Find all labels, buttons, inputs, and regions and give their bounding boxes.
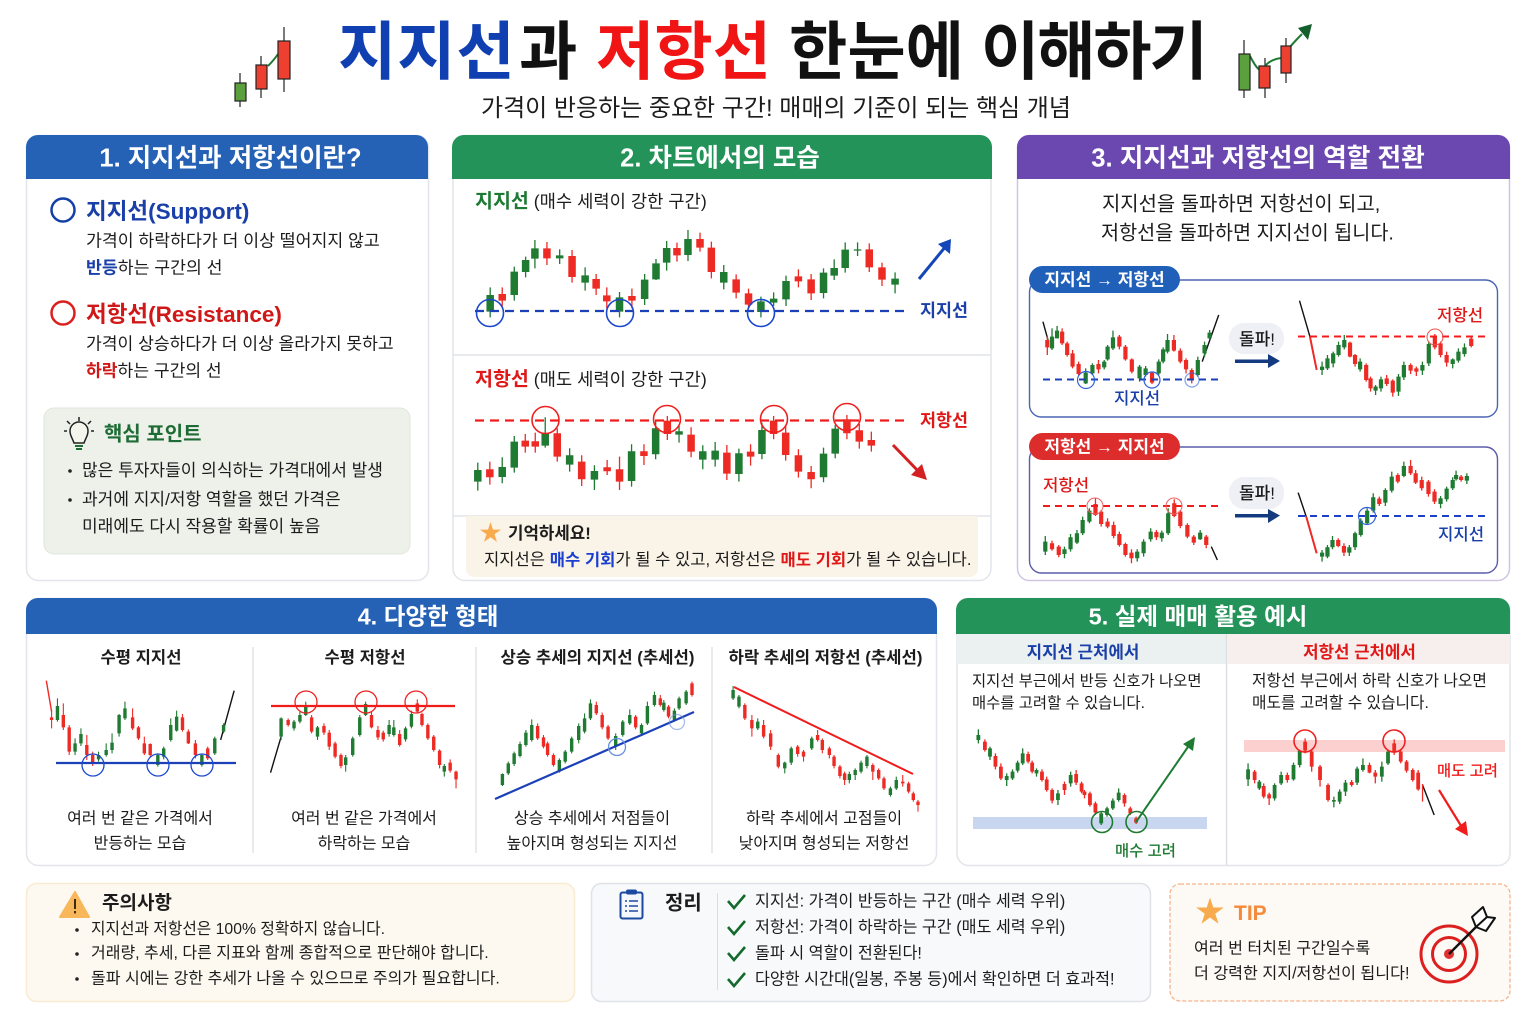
divider: [1226, 634, 1228, 865]
column: horizontal support: 수평 지지선: [101, 648, 181, 667]
tip text: 여러 번 터치된 구간일수록: [1194, 940, 1370, 958]
panel 2 header bar: [452, 135, 992, 179]
column: near support: 지지선 근처에서: [1027, 643, 1139, 662]
touch circles: [295, 691, 427, 713]
support touch circles: [1078, 372, 1199, 388]
sell circles: [1294, 730, 1405, 752]
mini chart: [502, 682, 692, 786]
column: downtrend resistance: 하락 추세의 저항선 (추세선): [729, 648, 922, 667]
column dividers: [253, 647, 712, 853]
new support line: [1298, 515, 1486, 517]
resistance definition: 가격이 상승하다가 더 이상 올라가지 못하고: [86, 334, 394, 354]
resistance touch circle: [1427, 329, 1443, 345]
icon: light bulb: [64, 417, 94, 449]
panel 5 header bar: [956, 598, 1510, 634]
support definition: [86, 230, 380, 278]
resistance zone band: [1244, 740, 1505, 752]
arrow: sell: [1439, 790, 1468, 836]
remember callout: [466, 516, 978, 577]
support explanation: 매수를 고려할 수 있습니다.: [972, 694, 1145, 712]
caption: 상승 추세에서 저점들이: [514, 810, 670, 828]
breakout bubble: [1229, 477, 1284, 509]
resistance explanation: 매도를 고려할 수 있습니다.: [1252, 694, 1429, 712]
resistance touch circles: [1087, 498, 1182, 514]
support term: 지지선(Support): [86, 199, 249, 224]
mini chart: [271, 699, 456, 788]
panel: caution: [26, 884, 574, 1002]
resistance definition: [86, 334, 394, 380]
arrow: down: [893, 445, 927, 480]
trend line: [734, 687, 913, 774]
resistance line: [271, 705, 455, 707]
check list: 돌파 시 역할이 전환된다!: [755, 944, 922, 962]
support subheading: 지지선 (매수 세력이 강한 구간): [475, 190, 707, 212]
panel: tip: [1170, 884, 1510, 1001]
touch circles: [608, 714, 684, 756]
caution bullets: 지지선과 저항선은 100% 정확하지 않습니다.: [91, 920, 385, 938]
icon: candles with arrow right: [1239, 24, 1312, 98]
breakout bubble: 돌파!: [1239, 330, 1275, 349]
caution heading: 주의사항: [102, 892, 172, 914]
caution bullets: 돌파 시에는 강한 추세가 나올 수 있으므로 주의가 필요합니다.: [91, 970, 500, 988]
icon: red ring: [52, 302, 74, 324]
column: downtrend resistance: [729, 648, 922, 852]
icon: rising candles left: [235, 27, 290, 107]
divider: [453, 354, 991, 356]
callout text: 지지선은 매수 기회가 될 수 있고, 저항선은 매도 기회가 될 수 있습니다.: [484, 550, 971, 569]
arrow: up: [919, 239, 951, 279]
caption: [507, 810, 677, 852]
candles after breakout: [1300, 301, 1471, 397]
subtitle: 가격이 반응하는 중요한 구간! 매매의 기준이 되는 핵심 개념: [481, 95, 1071, 122]
callout heading: 기억하세요!: [508, 524, 591, 543]
tip text: [1194, 940, 1409, 982]
title: 이해하기: [981, 18, 1205, 88]
title: 과: [519, 18, 577, 88]
breakout bubble: 돌파!: [1239, 484, 1275, 503]
panel: 3 role reversal: [1017, 135, 1510, 580]
resistance touch circles: [532, 404, 860, 434]
column: near resistance: [1227, 634, 1510, 836]
resistance subheading: 저항선 (매도 세력이 강한 구간): [475, 368, 707, 390]
caption: [739, 810, 909, 852]
pill label: [1029, 433, 1180, 460]
panel: 5 trading examples: [956, 598, 1510, 866]
key point box: [44, 408, 410, 554]
icon: target with dart: [1421, 907, 1495, 982]
column: near support: [957, 634, 1226, 860]
divider: [453, 515, 991, 517]
caption: 반등하는 모습: [94, 834, 186, 852]
intro text: [1101, 192, 1394, 244]
caption: 높아지며 형성되는 지지선: [507, 834, 677, 852]
resistance candlestick chart: [478, 415, 871, 491]
arrow: breakout: [1235, 354, 1280, 368]
check list: 저항선: 가격이 하락하는 구간 (매도 세력 우위): [755, 918, 1065, 936]
resistance definition: 하락하는 구간의 선: [86, 360, 222, 380]
panel 3 header bar: [1017, 135, 1510, 179]
tip text: 더 강력한 지지/저항선이 됩니다!: [1194, 964, 1409, 982]
check list: 지지선: 가격이 반등하는 구간 (매수 세력 우위): [755, 892, 1065, 910]
buy label: 매수 고려: [1115, 842, 1176, 860]
support definition: 반등하는 구간의 선: [86, 258, 223, 278]
summary heading: 정리: [665, 892, 702, 914]
candles: [978, 729, 1136, 825]
caution bullets: 거래량, 추세, 다른 지표와 함께 종합적으로 판단해야 합니다.: [91, 944, 489, 962]
key point heading: 핵심 포인트: [104, 422, 202, 446]
touch circles: [82, 754, 213, 776]
panel: summary: [592, 884, 1150, 1002]
check list: 다양한 시간대(일봉, 주봉 등)에서 확인하면 더 효과적!: [755, 970, 1115, 988]
icon: warning triangle: [60, 892, 89, 917]
panel 4 heading: 4. 다양한 형태: [358, 604, 498, 630]
support label: 지지선: [1438, 525, 1484, 544]
resistance explanation: [1252, 672, 1487, 712]
pill label: 저항선 → 지지선: [1044, 438, 1165, 456]
intro text: 지지선을 돌파하면 저항선이 되고,: [1102, 192, 1380, 216]
candles before breakout: [1045, 498, 1217, 563]
key point bullets: 미래에도 다시 작용할 확률이 높음: [82, 517, 320, 536]
check list: [728, 892, 1115, 988]
caption: 여러 번 같은 가격에서: [291, 810, 437, 828]
mini chart: [46, 681, 234, 767]
support touch circles: [476, 300, 774, 326]
support explanation: [972, 672, 1202, 712]
buy circles: [1092, 812, 1147, 832]
caption: [67, 810, 213, 852]
column: near resistance: 저항선 근처에서: [1303, 643, 1416, 662]
icon: star: [480, 522, 501, 542]
pill label: 지지선 → 저항선: [1044, 270, 1165, 290]
panel 3 heading: 3. 지지선과 저항선의 역할 전환: [1091, 144, 1425, 172]
support touch circle: [1358, 508, 1376, 524]
new resistance line: [1298, 336, 1486, 338]
support line: [1043, 378, 1222, 380]
pill label: [1029, 266, 1180, 293]
resistance line: [1043, 505, 1222, 507]
caption: 낮아지며 형성되는 저항선: [739, 834, 909, 852]
column: uptrend support: 상승 추세의 지지선 (추세선): [501, 648, 694, 667]
resistance term: 저항선(Resistance): [86, 302, 282, 327]
panel 1 header bar: [26, 135, 428, 179]
candles: [1248, 738, 1434, 815]
support label: 지지선: [920, 300, 968, 320]
divider: [716, 893, 718, 990]
caption: 하락 추세에서 고점들이: [746, 810, 902, 828]
support label: 지지선: [1114, 389, 1160, 408]
support definition: 가격이 하락하다가 더 이상 떨어지지 않고: [86, 230, 380, 250]
tip heading: TIP: [1234, 902, 1267, 925]
support zone band: [973, 817, 1207, 829]
support dashed line: [475, 310, 908, 312]
icon: blue ring: [52, 198, 74, 222]
candles before breakout: [1043, 315, 1219, 384]
column: horizontal support: [46, 648, 236, 852]
panel: 2 chart view: [452, 135, 992, 580]
panel 2 heading: 2. 차트에서의 모습: [620, 144, 820, 172]
mini chart: [733, 686, 918, 812]
key point bullets: 과거에 지지/저항 역할을 했던 가격은: [82, 490, 341, 509]
support line: [56, 762, 236, 764]
panel 5 heading: 5. 실제 매매 활용 예시: [1089, 604, 1307, 630]
caution bullets: [75, 920, 500, 988]
sub-panel: support to resistance: [1029, 266, 1498, 417]
sell label: 매도 고려: [1437, 762, 1498, 780]
panel: 1 definition: [26, 135, 428, 580]
resistance label: 저항선: [920, 410, 968, 430]
caption: 하락하는 모습: [318, 834, 410, 852]
intro text: 저항선을 돌파하면 지지선이 됩니다.: [1101, 222, 1394, 244]
support explanation: 지지선 부근에서 반등 신호가 나오면: [972, 672, 1202, 690]
icon: star: [1196, 898, 1224, 924]
title: 지지선: [338, 18, 515, 88]
resistance label: 저항선: [1043, 476, 1089, 495]
caption: [291, 810, 437, 852]
icon: clipboard: [620, 890, 642, 918]
key point bullets: [68, 461, 383, 536]
title: 저항선: [596, 18, 771, 88]
candles after breakout: [1298, 460, 1467, 562]
breakout bubble: [1229, 323, 1284, 354]
column: horizontal resistance: 수평 저항선: [325, 648, 405, 667]
page header: [235, 18, 1312, 122]
caption: 여러 번 같은 가격에서: [67, 810, 213, 828]
title: 한눈에: [789, 18, 964, 88]
trend line: [495, 712, 694, 799]
arrow: breakout: [1235, 509, 1280, 523]
resistance dashed line: [475, 419, 908, 422]
panel: 4 various forms: [26, 598, 937, 866]
panel 4 header bar: [26, 598, 937, 634]
key point bullets: 많은 투자자들이 의식하는 가격대에서 발생: [82, 461, 383, 480]
arrow: buy: [1136, 737, 1195, 822]
panel 1 heading: 1. 지지선과 저항선이란?: [99, 144, 362, 172]
column: horizontal resistance: [271, 648, 456, 852]
resistance explanation: 저항선 부근에서 하락 신호가 나오면: [1252, 672, 1487, 690]
support candlestick chart: [490, 230, 895, 317]
column: uptrend support: [495, 648, 694, 852]
sub-panel: resistance to support: [1029, 433, 1498, 573]
resistance label: 저항선: [1437, 306, 1483, 325]
